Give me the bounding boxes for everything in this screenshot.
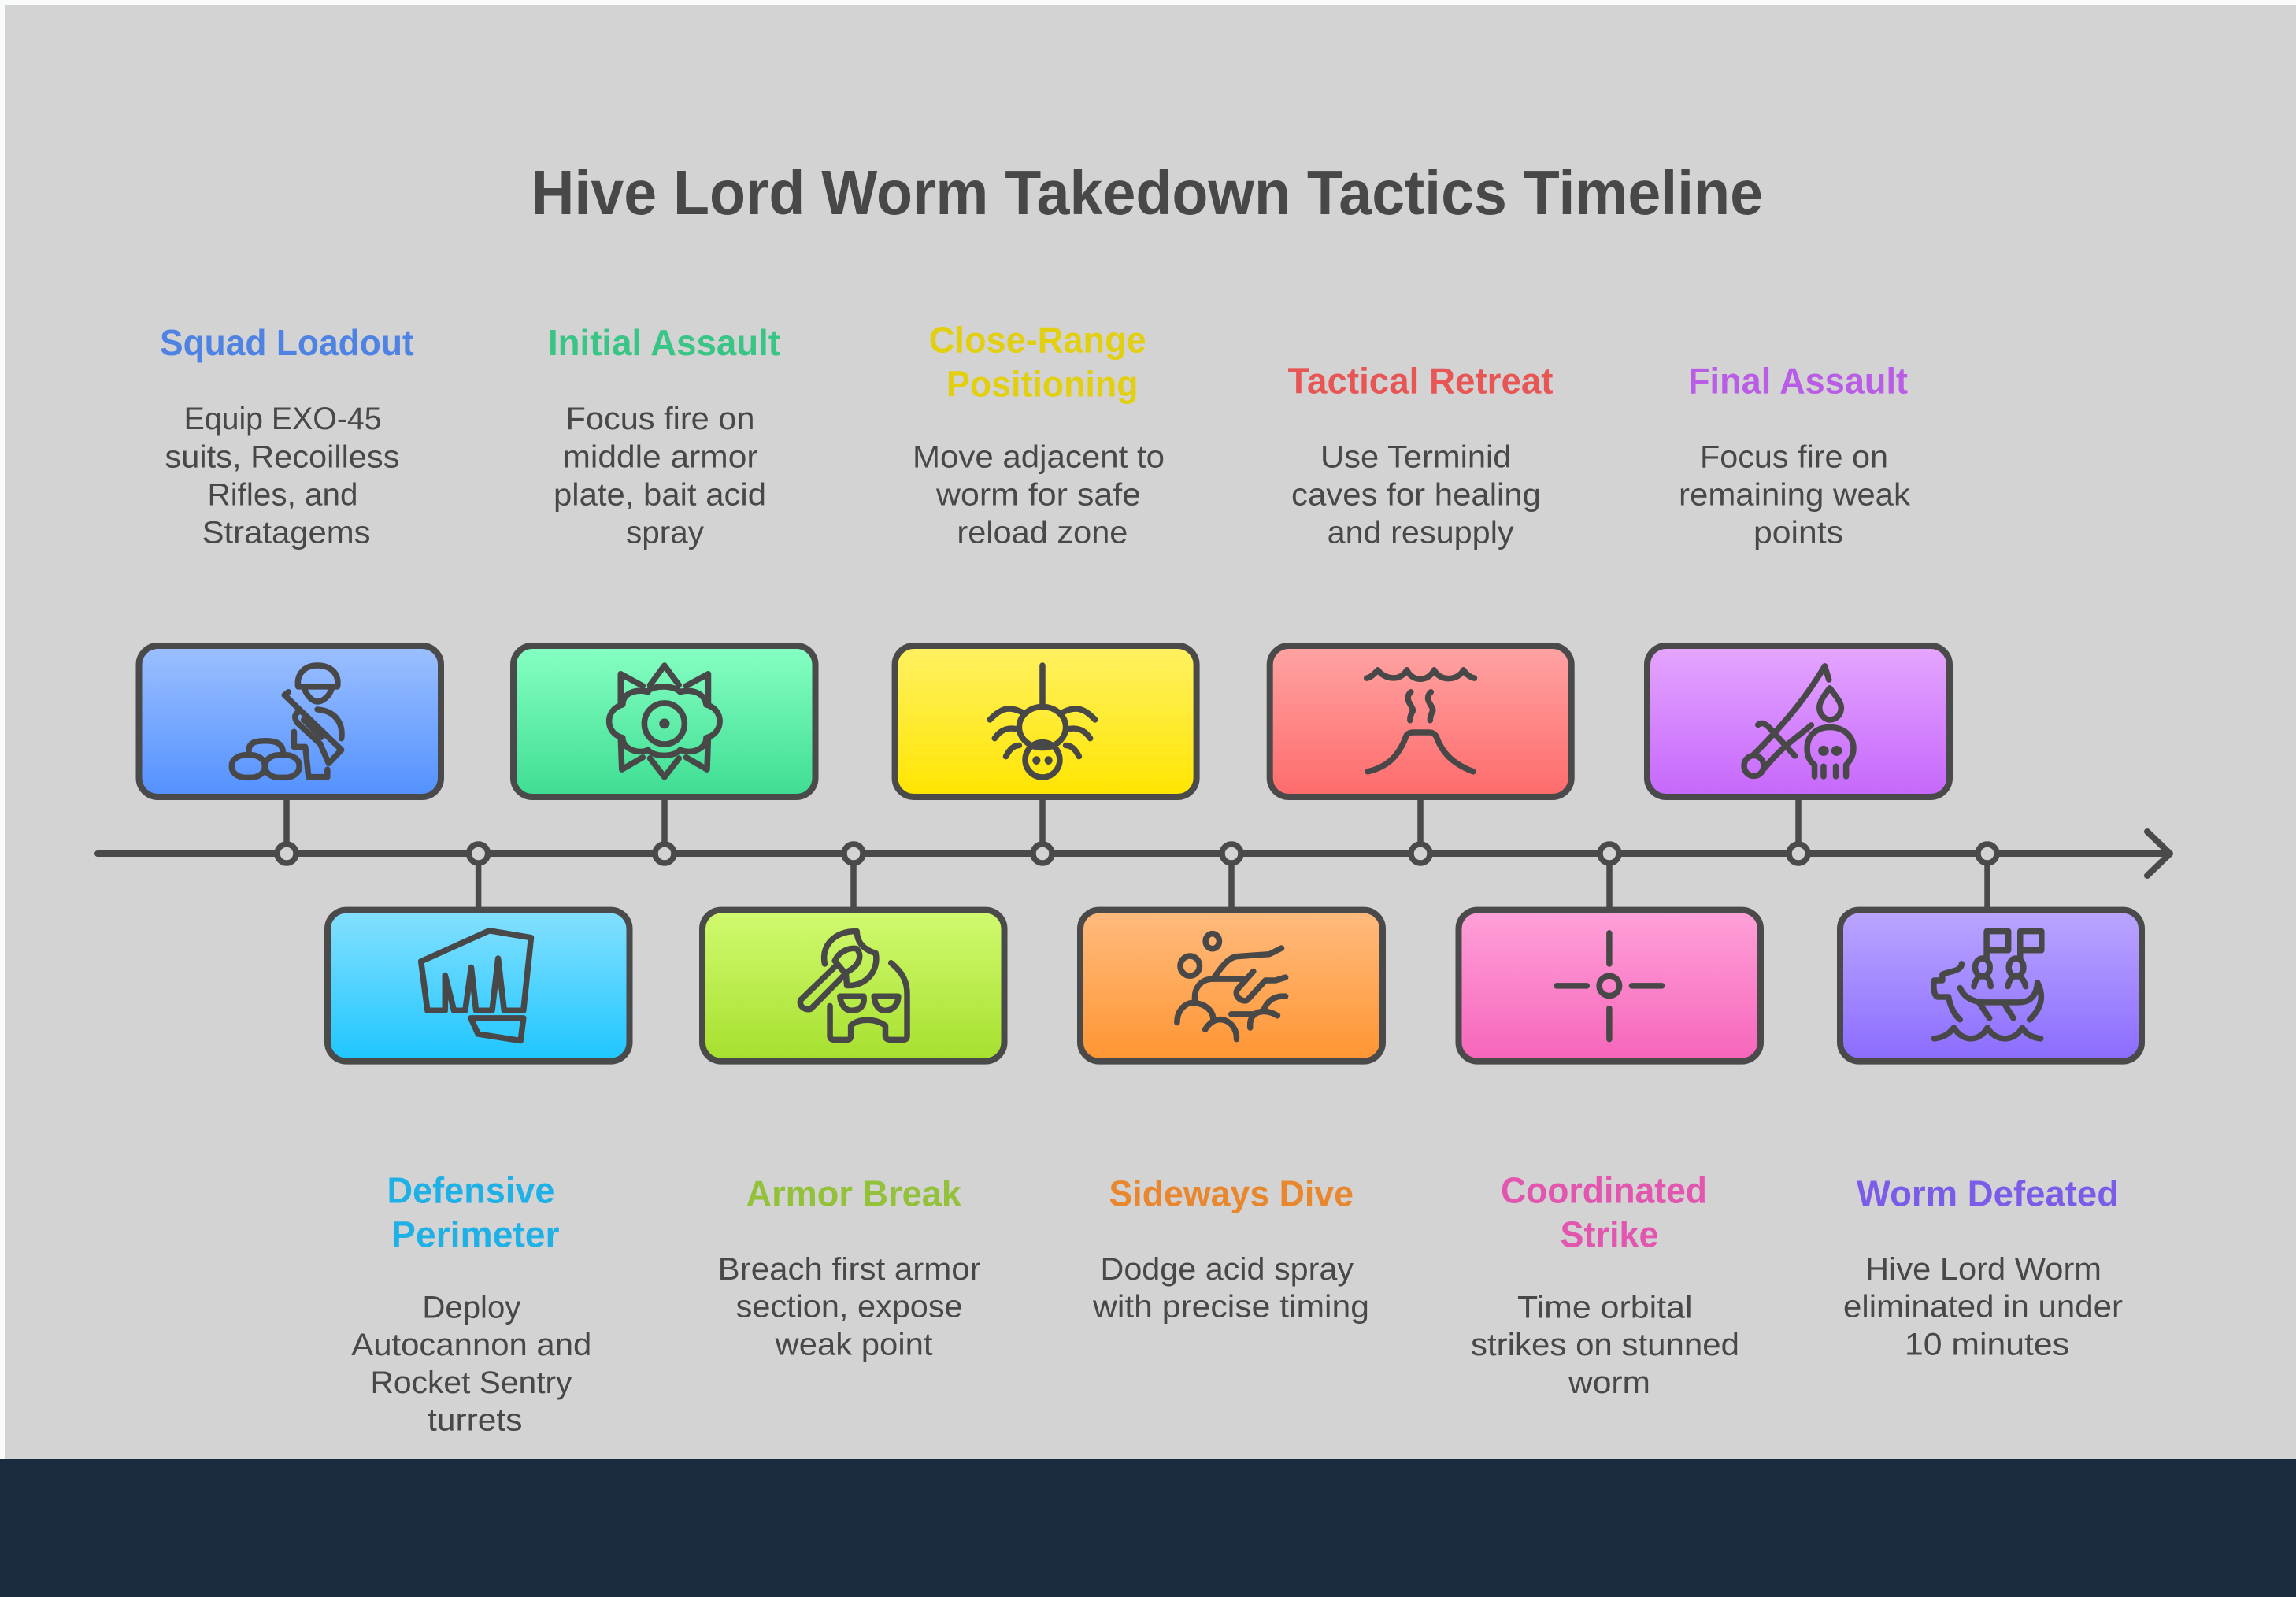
text: Armor Break: Breach first armor	[718, 1252, 981, 1287]
icon: fist	[421, 931, 531, 1041]
text: Sideways Dive	[1092, 1173, 1369, 1325]
text: Sideways Dive: with precise timing	[1092, 1290, 1369, 1325]
icon: sword, drop and skull	[1744, 666, 1853, 776]
text: Defensive Perimeter: Perimeter	[391, 1213, 560, 1254]
text: Close-Range Positioning: reload zone	[957, 515, 1128, 550]
text: Close-Range Positioning: Positioning	[946, 363, 1139, 404]
text: Close-Range Positioning: Move adjacent to	[913, 439, 1165, 474]
text: Defensive Perimeter: turrets	[428, 1403, 523, 1438]
text: Armor Break: weak point	[774, 1328, 932, 1362]
title: Hive Lord Worm Takedown Tactics Timeline	[531, 157, 1763, 228]
step 2 box: Defensive Perimeter	[328, 910, 630, 1062]
text: Final Assault: Focus fire on	[1700, 439, 1888, 474]
text: Coordinated Strike: Coordinated	[1501, 1170, 1707, 1211]
text: Tactical Retreat: caves for healing	[1291, 478, 1541, 513]
icon: hand with clouds and bubbles	[1177, 934, 1286, 1039]
text: Squad Loadout: Rifles, and	[208, 478, 357, 513]
text: Tactical Retreat: Tactical Retreat	[1288, 360, 1553, 401]
text: Initial Assault: Focus fire on	[565, 402, 754, 436]
step 8 box: Coordinated Strike	[1458, 910, 1761, 1062]
text: Initial Assault: spray	[626, 515, 704, 550]
text: Squad Loadout: suits, Recoilless	[165, 439, 400, 474]
text: Final Assault: remaining weak	[1679, 478, 1911, 513]
text: Sideways Dive: Sideways Dive	[1109, 1173, 1354, 1214]
text: Armor Break: section, expose	[736, 1290, 963, 1325]
text: Worm Defeated	[1843, 1173, 2123, 1362]
footer band	[0, 1459, 2296, 1597]
text: Coordinated Strike: Time orbital	[1517, 1290, 1693, 1325]
text: Close-Range Positioning: Close-Range	[929, 320, 1146, 361]
timeline axis with arrow	[98, 832, 2170, 876]
text: Tactical Retreat: and resupply	[1328, 515, 1514, 550]
text: Worm Defeated: 10 minutes	[1905, 1328, 2069, 1362]
text: Defensive Perimeter: Rocket Sentry	[370, 1365, 572, 1400]
text: Coordinated Strike: worm	[1568, 1365, 1650, 1400]
text: Sideways Dive: Dodge acid spray	[1101, 1252, 1354, 1287]
text: Defensive Perimeter: Defensive	[387, 1170, 554, 1211]
text: Coordinated Strike: strikes on stunned	[1471, 1328, 1739, 1362]
step 5 box: Close-Range Positioning	[895, 646, 1197, 797]
text: Initial Assault: middle armor	[562, 439, 757, 474]
step 3 box: Initial Assault	[513, 646, 816, 797]
step 1 box: Squad Loadout	[139, 646, 441, 797]
text: Coordinated Strike: Strike	[1561, 1213, 1658, 1254]
text: Initial Assault	[548, 322, 780, 550]
icon: soldier with sandbags	[231, 665, 342, 777]
text: Squad Loadout: Equip EXO-45	[184, 402, 382, 436]
text: Close-Range Positioning: worm for safe	[935, 478, 1141, 513]
icon: spider	[990, 665, 1095, 777]
text: Squad Loadout: Stratagems	[202, 515, 371, 550]
step 10 box: Worm Defeated	[1840, 910, 2142, 1062]
text: Initial Assault: plate, bait acid	[554, 478, 766, 513]
text: Defensive Perimeter: Autocannon and	[351, 1328, 591, 1362]
text: Worm Defeated: eliminated in under	[1843, 1290, 2123, 1325]
text: Worm Defeated: Hive Lord Worm	[1865, 1252, 2102, 1287]
icon: spiked eye	[609, 665, 720, 777]
icon: ship with flags on waves	[1934, 932, 2042, 1039]
text: Final Assault: points	[1753, 515, 1843, 550]
text: Squad Loadout: Squad Loadout	[160, 322, 414, 363]
connectors and nodes	[277, 800, 1997, 907]
step 6 box: Sideways Dive	[1080, 910, 1383, 1062]
text: Tactical Retreat	[1288, 360, 1553, 550]
step 9 box: Final Assault	[1647, 646, 1950, 797]
text: Initial Assault: Initial Assault	[548, 322, 780, 363]
step 4 box: Armor Break	[702, 910, 1005, 1062]
step 7 box: Tactical Retreat	[1270, 646, 1572, 797]
text: Armor Break: Armor Break	[746, 1173, 961, 1214]
text: Final Assault	[1679, 360, 1911, 550]
text: Defensive Perimeter: Deploy	[422, 1290, 520, 1325]
text: Defensive Perimeter	[351, 1170, 591, 1438]
text: Final Assault: Final Assault	[1688, 360, 1908, 401]
icon: crosshair	[1557, 933, 1662, 1039]
text: Tactical Retreat: Use Terminid	[1320, 439, 1512, 474]
icon: volcano	[1367, 670, 1474, 772]
text: Squad Loadout	[160, 322, 414, 550]
text: Close-Range Positioning	[913, 320, 1165, 550]
text: Worm Defeated: Worm Defeated	[1857, 1173, 2119, 1214]
text: Coordinated Strike	[1471, 1170, 1739, 1400]
icon: axe and helmet	[800, 932, 907, 1039]
text: Armor Break	[718, 1173, 981, 1362]
